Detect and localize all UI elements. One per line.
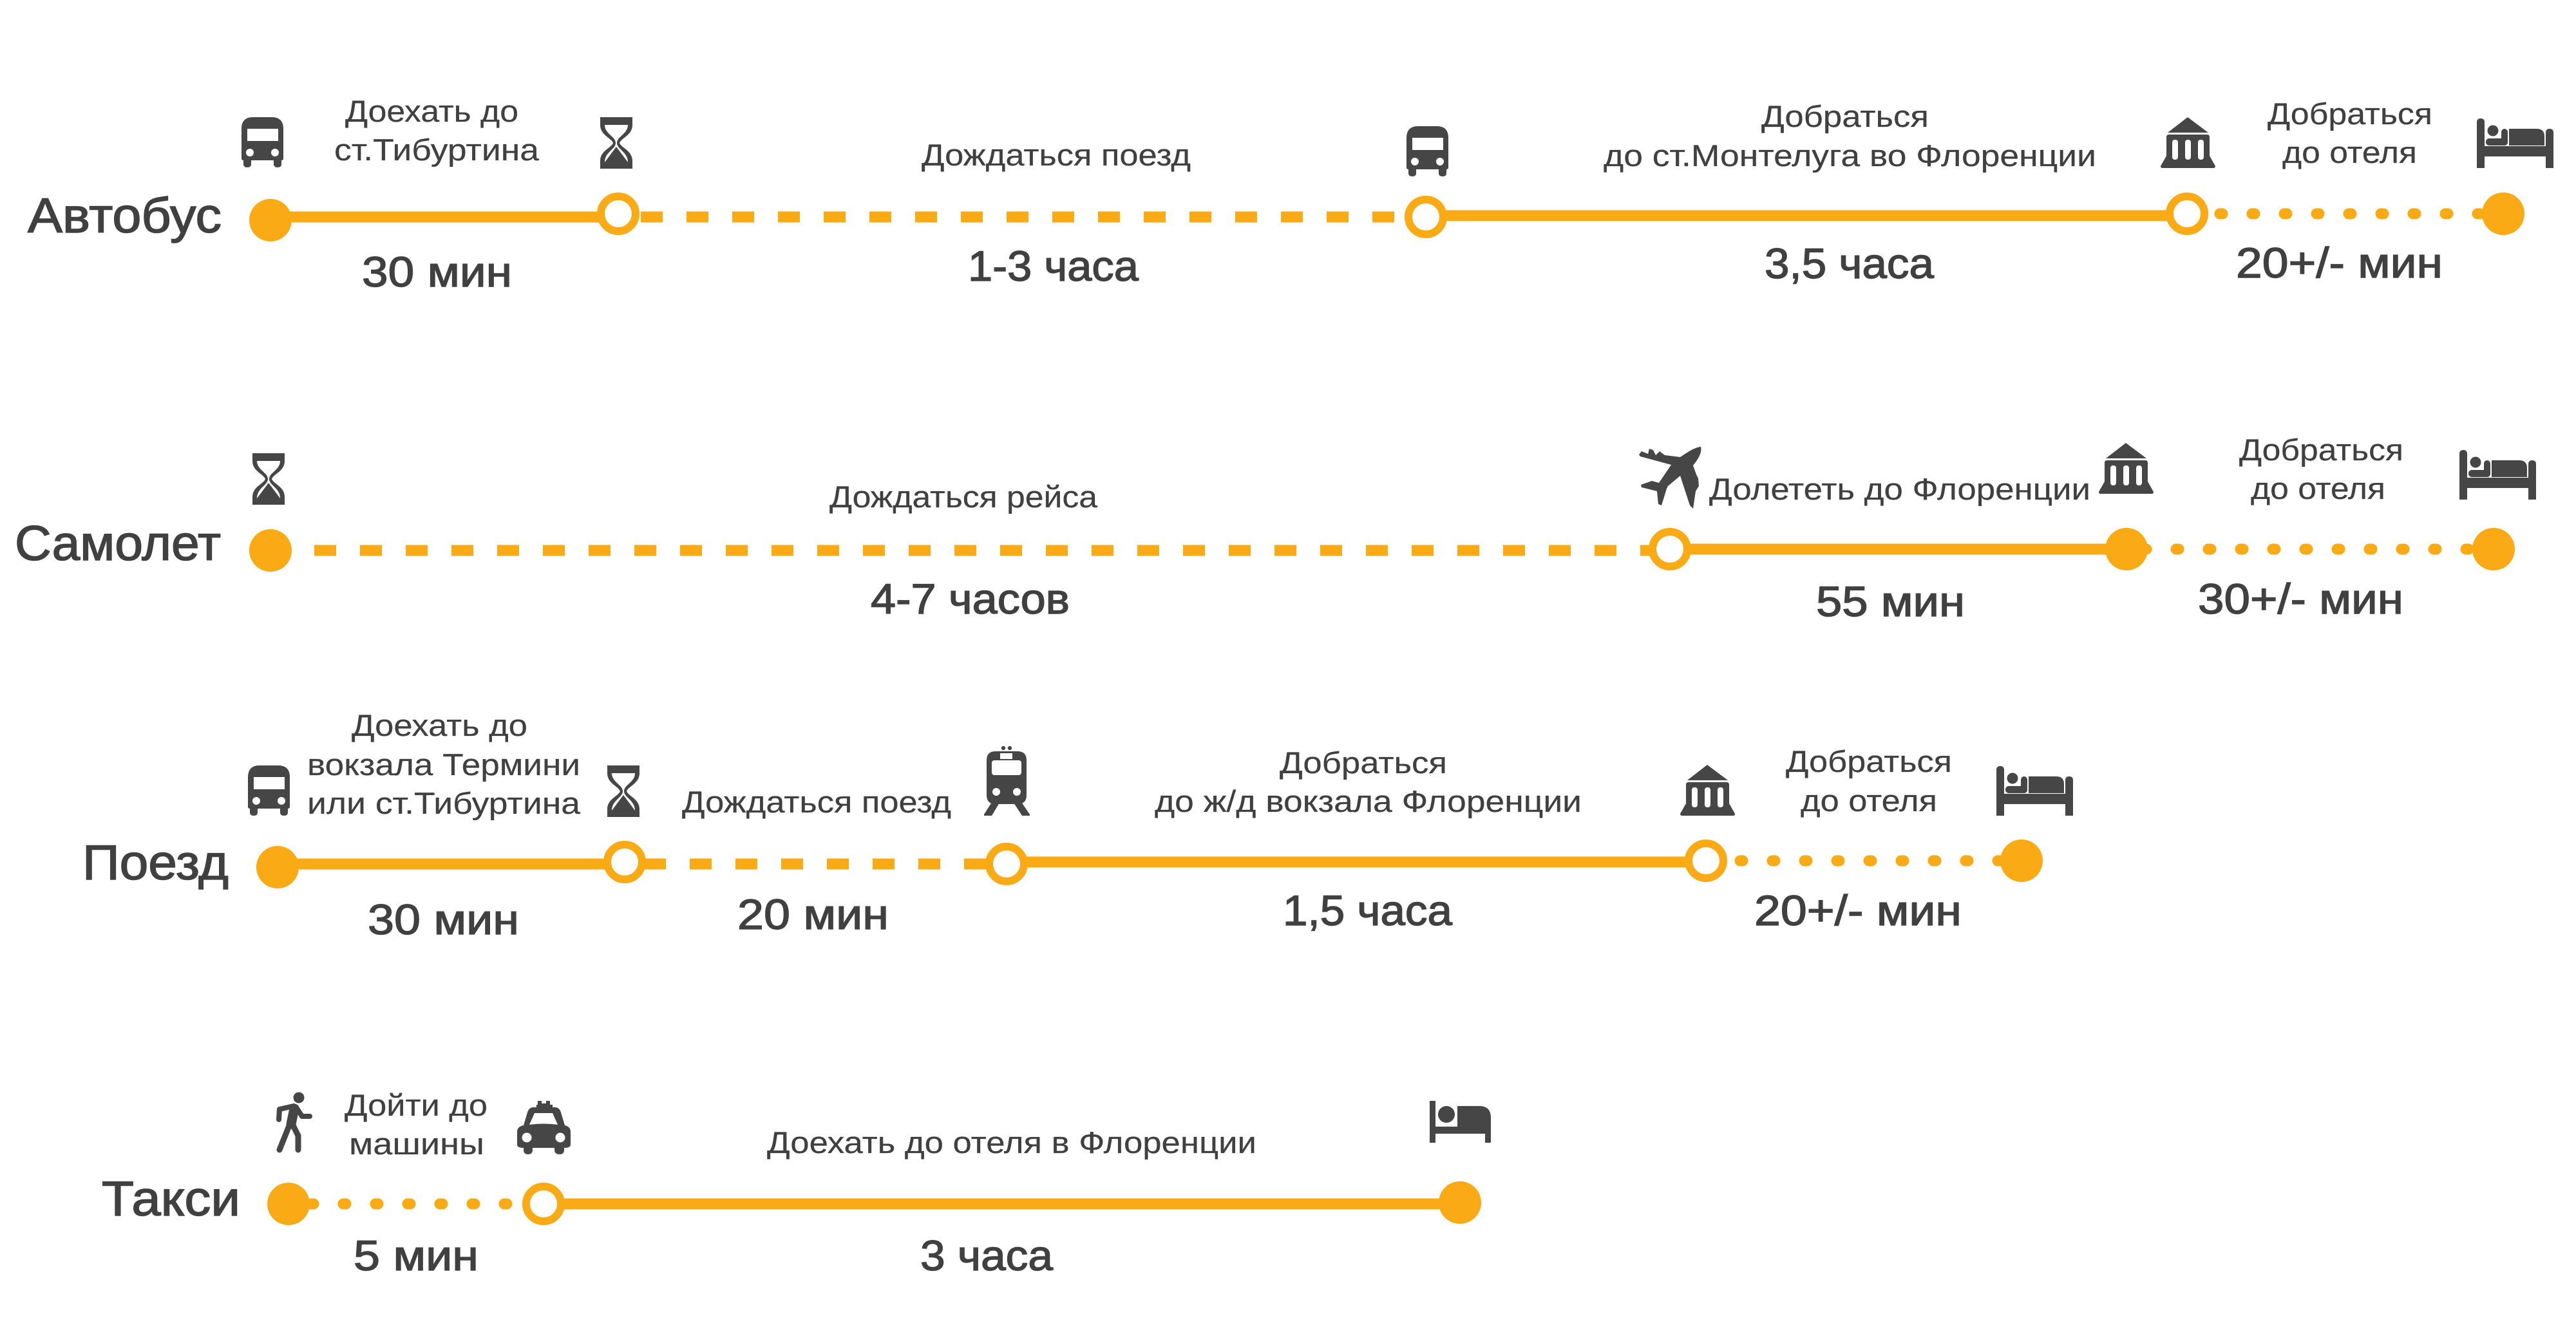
icon: hourglass [252,453,285,505]
icon: plane [1639,447,1701,509]
icon: train [984,746,1030,816]
label: fly to Florence: Долететь до Флоренции [1709,472,2090,506]
label: to Montelungo station: Добраться [1761,99,1929,133]
route: train [82,708,2073,943]
label: drive to the hotel in Florence: Доехать до отеля в Флоренции [767,1125,1256,1159]
duration: 1-3 hours: 1-3 часа [968,242,1139,290]
label: to Tiburtina: ст.Тибуртина [334,133,540,167]
label: wait for the train: Дождаться поезд [682,785,951,819]
label: to Termini or Tiburtina: или ст.Тибуртина [307,786,581,820]
icon: hourglass [600,117,632,169]
icon: bed [1996,766,2073,816]
duration: 20 min: 20+/- мин [1754,886,1962,934]
duration: 20 min: 20 мин [737,890,889,938]
duration: 5 min: 5 мин [354,1232,478,1279]
duration: 30 min: 30 мин [362,248,512,295]
label: to hotel: до отеля [2282,135,2417,169]
route line: train [256,839,2043,888]
label: to Montelungo station [1604,99,2096,173]
icon: station building [2161,117,2215,168]
icon: bus [248,765,290,816]
icon: bus [242,117,283,167]
heading: Такси: Такси [102,1172,240,1226]
label: wait for the train: Дождаться поезд [922,138,1191,172]
label: to Termini or Tiburtina: вокзала Термини [307,747,580,782]
label: to Florence station: до ж/д вокзала Флоренции [1155,784,1582,818]
icon: bed [1430,1101,1491,1143]
label: to Termini or Tiburtina [307,708,581,820]
label: to Tiburtina [334,94,540,167]
label: walk to the car: Дойти до [345,1088,488,1122]
heading: Самолет: Самолет [15,516,221,571]
heading: Поезд: Поезд [82,836,229,890]
label: to Florence station [1155,746,1582,818]
label: wait for the flight: Дождаться рейса [829,480,1098,514]
icon: station building [1680,765,1735,816]
duration: 55 min: 55 мин [1816,577,1965,625]
label: to hotel: до отеля [2251,471,2385,505]
duration: 3.5 hours: 3,5 часа [1765,239,1934,287]
label: to Tiburtina: Доехать до [345,94,518,128]
icon: bed [2459,450,2536,500]
label: to hotel: Добраться [2268,97,2432,131]
route: plane [15,433,2536,625]
route: taxi [102,1088,1491,1279]
icon: bus [1406,126,1448,176]
route: bus [28,94,2553,295]
duration: 20 min: 20+/- мин [2236,239,2443,286]
label: to hotel: Добраться [2239,433,2403,467]
icon: hourglass [607,765,639,817]
icon: bed [2477,118,2553,168]
label: walk to the car [345,1088,488,1161]
route line: taxi [267,1181,1481,1225]
label: walk to the car: машины [349,1127,484,1161]
icon: station building [2099,443,2154,494]
duration: 4-7 hours: 4-7 часов [871,575,1070,623]
label: to hotel: до отеля [1801,783,1937,818]
label: to hotel: Добраться [1786,744,1952,778]
label: to Termini or Tiburtina: Доехать до [352,708,527,742]
duration: 30 min: 30+/- мин [2198,575,2403,623]
label: to Florence station: Добраться [1280,746,1447,780]
route line: plane [249,528,2515,572]
duration: 3 hours: 3 часа [920,1232,1053,1279]
icon: taxi [517,1101,571,1154]
label: to hotel [1786,744,1952,818]
duration: 30 min: 30 мин [368,896,519,943]
label: to hotel [2268,97,2432,169]
label: to hotel [2239,433,2403,505]
label: to Montelungo station: до ст.Монтелуга во Флоренции [1604,138,2096,173]
duration: 1.5 hours: 1,5 часа [1283,886,1452,934]
icon: walking person [279,1092,310,1150]
route line: bus [249,192,2524,241]
heading: Автобус: Автобус [28,189,222,243]
